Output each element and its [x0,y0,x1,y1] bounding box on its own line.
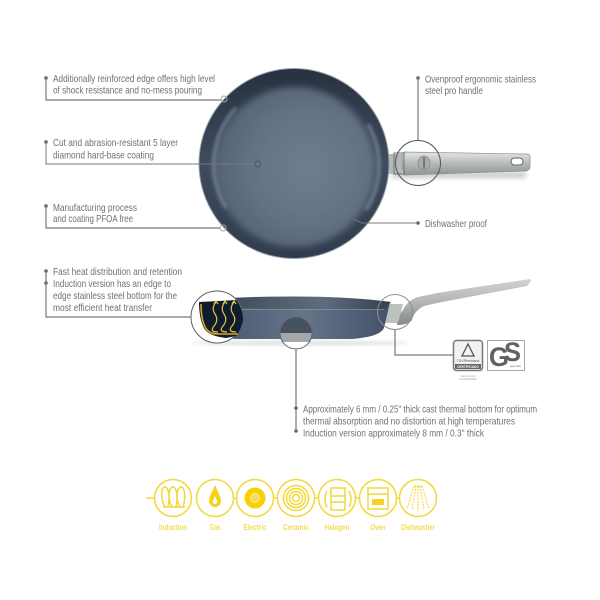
icon: oven: Oven [370,523,386,532]
pan disc [198,68,390,259]
callout: handle [396,74,536,186]
icon: induction [146,480,192,532]
callout: diamond coating [44,137,261,167]
callout: PFOA free [44,202,226,231]
cross-section magnifier [191,291,243,343]
callout: thermal bottom [294,349,537,440]
callout: diamond coating: Cut and abrasion-resistant 5 layer [53,137,178,149]
thick base magnifier [280,317,312,349]
icon: electric: Electric [244,523,267,532]
icon: dishwasher: Dishwasher [401,523,435,532]
callout: heat distribution: edge stainless steel bottom for the [53,290,177,302]
certification badge: GS: G [489,342,509,372]
icon: oven [356,480,396,532]
heat arrows [212,301,236,332]
side view frying pan [190,279,531,346]
icon: induction: Induction [159,523,187,532]
callout: PFOA free: Manufacturing process [53,202,137,214]
callout: handle: steel pro handle [425,85,483,97]
callout: dishwasher proof [353,218,487,230]
icon: ceramic: Ceramic [283,523,309,532]
callout: thermal bottom: Induction version approximately 8 mm / 0.3" thick [303,428,485,440]
icon: electric [234,480,274,532]
callout: heat distribution [44,266,191,317]
icon: ceramic [274,480,314,532]
pan handle top view [388,152,530,175]
cooktop compatibility icons [146,480,436,532]
callout: thermal bottom: thermal absorption and no distortion at high temperatures [303,416,515,428]
side pan body [198,297,390,339]
callout: diamond coating: diamond hard-base coating [53,150,154,162]
icon: halogen [315,480,356,532]
certification badge: TUV: TÜVRheinland [457,359,479,363]
top view frying pan [198,68,530,259]
certification badge: TUV [454,340,482,381]
icon: halogen: Halogen [324,523,350,532]
handle rivet magnifier and certification callout [378,294,453,355]
callout: handle: Ovenproof ergonomic stainless [425,74,536,86]
callout: reinforced edge: of shock resistance and no-mess pouring [53,84,202,96]
callout: heat distribution: Fast heat distribution and retention [53,266,182,278]
certification badge: GS: S [504,337,521,367]
icon: dishwasher [397,480,436,532]
certification badge: TUV: ID 0000000000 [459,378,477,381]
icon: gas: Gas [210,523,221,532]
icon: gas [196,480,234,532]
callout: heat distribution: most efficient heat transfer [53,302,152,314]
certification badge: GS [488,337,524,372]
callout: PFOA free: and coating PFOA free [53,213,133,225]
callout: reinforced edge: Additionally reinforced edge offers high level [53,73,215,85]
side handle [397,279,531,325]
callout: dishwasher proof: Dishwasher proof [425,218,487,230]
callout: heat distribution: Induction version has an edge to [53,278,171,290]
certification badge: TUV: www.tuv.com [461,375,475,378]
certification badge: GS: geprüfte [510,364,521,368]
callout: reinforced edge [44,73,227,102]
certification badge: TUV: CERTIFICADO [457,365,479,369]
